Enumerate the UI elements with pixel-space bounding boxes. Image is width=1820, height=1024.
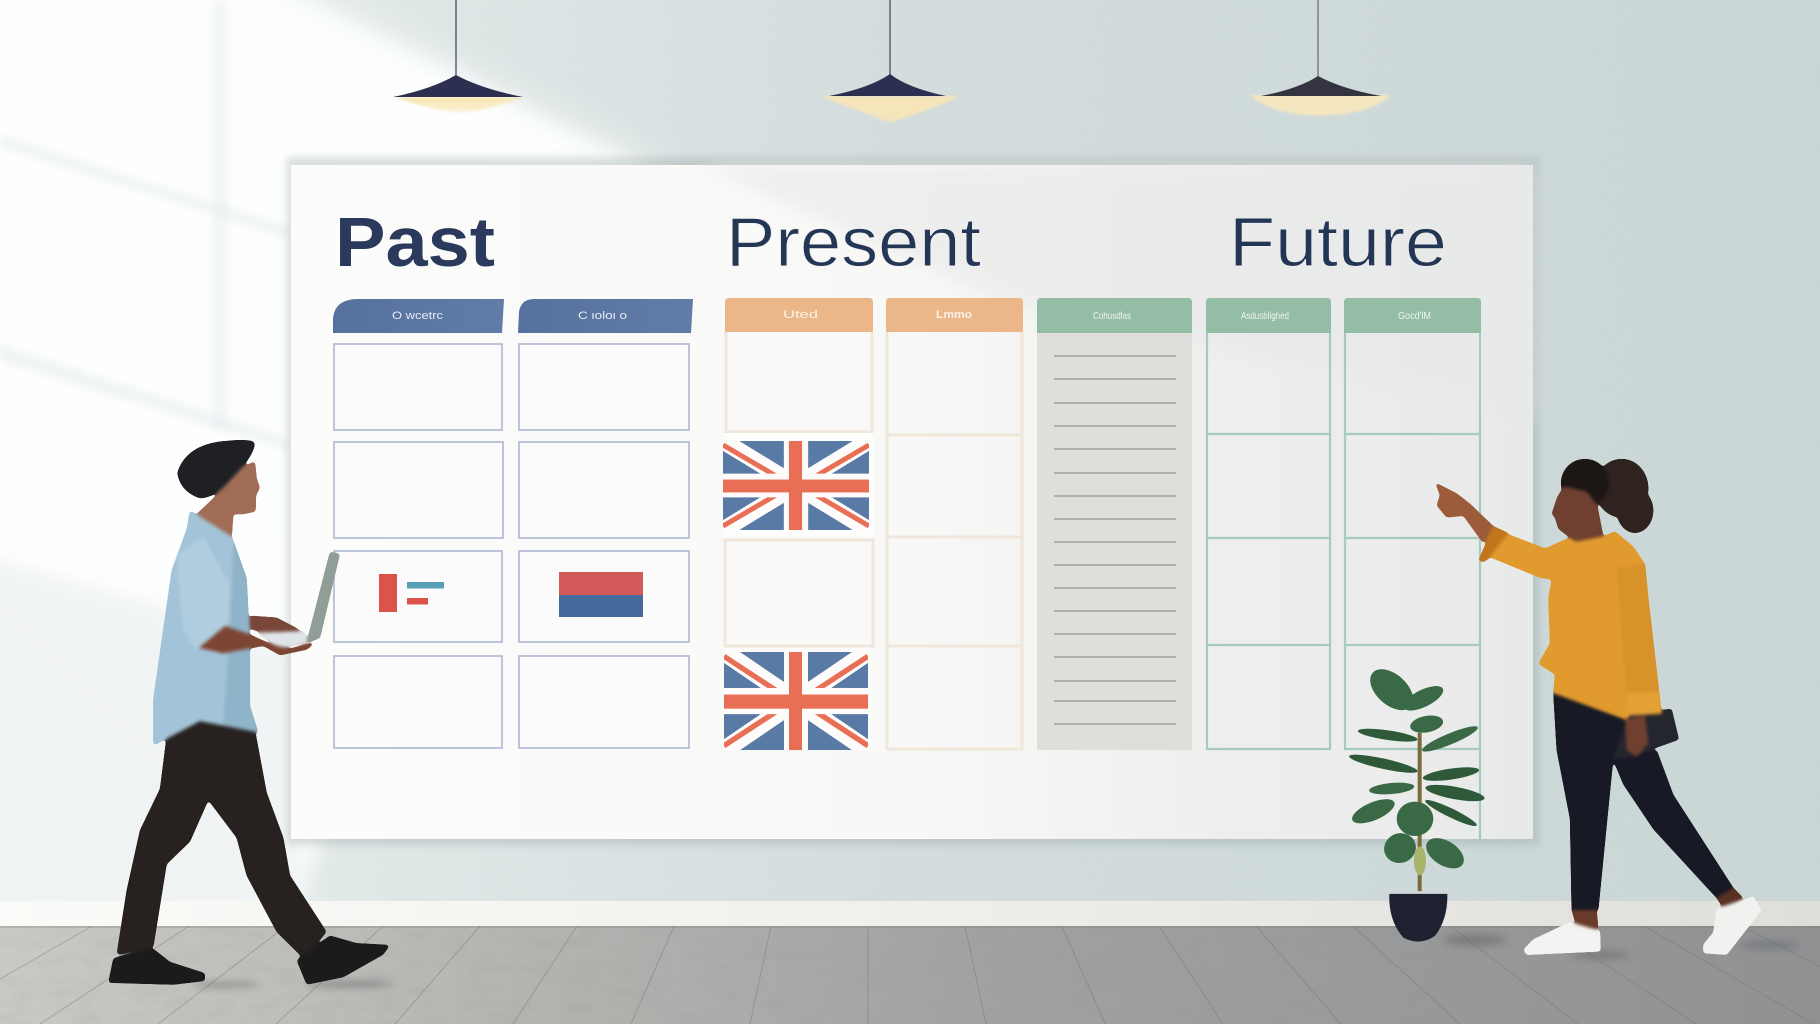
pointing arm and hand [1435,482,1493,543]
header: notes [1037,298,1192,333]
sweater [1490,531,1662,720]
header: past two [518,299,693,333]
pendant lamp left [393,0,523,112]
neck and face [197,461,260,539]
cells: future one [1207,333,1330,749]
title: Present: Present [726,203,981,281]
panel: present column two [886,298,1023,749]
shoe: front [297,936,390,985]
tablet [1610,709,1679,759]
title: Future: Future [1229,203,1447,281]
front leg [1553,693,1627,910]
icon: red and blue flag [559,572,643,617]
floor [0,926,1820,1024]
board [291,165,1533,839]
notes body [1037,333,1192,750]
cells: present one [724,332,873,750]
header: notes: Cohusdlas [1093,311,1131,322]
cells: future two [1345,333,1480,839]
sleeve cuff [1627,692,1662,716]
shirt [153,510,258,746]
cells: past one [334,344,503,748]
header: present two [886,298,1023,332]
pendant lamp right [1250,0,1390,116]
rear leg [1613,750,1733,898]
header: present one: Uted [783,309,818,321]
panel: past column one [333,299,504,748]
ponytail hair [1595,459,1653,533]
sleeve shade [1617,564,1662,716]
header: past one: O wcetrc [392,310,444,322]
leaves [1348,661,1486,875]
panel: present column one [723,298,873,750]
cells: past two [519,344,689,748]
laptop base [257,632,307,648]
pot [1389,894,1447,942]
shirt shade [223,540,258,732]
panel: future column one [1206,298,1331,749]
cells: present two [887,332,1022,749]
shoe: front [1523,922,1601,955]
front ankle [1572,910,1598,929]
ruled lines [1054,356,1176,724]
header: future one: Asdusblighed [1241,311,1289,322]
floor shadows [190,934,1800,988]
rear ankle [1717,888,1743,908]
trousers [117,714,327,958]
panel: lined notes column [1037,298,1192,750]
baseboard [0,901,1820,926]
laptop screen [307,552,340,642]
pendant lamp centre [820,0,960,122]
person: man with laptop [108,440,390,985]
rear hand [250,616,302,633]
header: past one [333,299,504,333]
shoe: rear [1703,896,1762,955]
title: Past: Past [335,203,495,281]
header: future one [1206,298,1331,333]
header: past two: C ιοlοι ο [578,310,627,322]
icon: flag top [723,441,869,530]
person: woman pointing [1435,459,1762,955]
panel: future column two [1344,298,1481,839]
beret [177,440,255,498]
sleeve [177,537,230,650]
neck and face [1552,486,1603,543]
header: future two [1344,298,1481,333]
wrist cuff [1478,526,1508,562]
head hair [1561,459,1609,507]
lower hand [1625,716,1648,757]
board shadow [287,157,1539,845]
shoe: rear [108,949,205,985]
icon: bars [379,574,444,612]
header: future two: Gocd'lM [1398,311,1431,322]
stem [1418,733,1422,891]
icon: flag bottom [724,652,868,750]
header: present one [725,298,873,332]
header: present two: Lmmo [936,309,972,321]
plant [1348,661,1486,942]
panel: past column two [518,299,693,748]
forearm [198,625,317,655]
